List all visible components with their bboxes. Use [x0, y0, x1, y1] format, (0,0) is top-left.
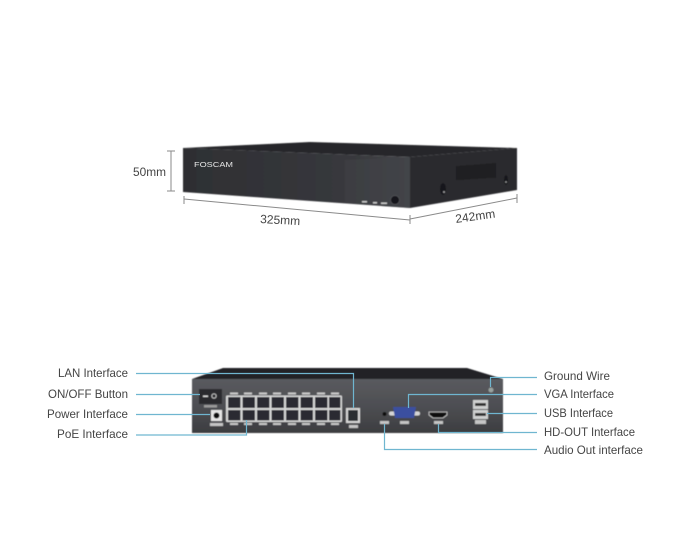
- power switch: [199, 389, 222, 404]
- side screws: [440, 175, 508, 195]
- power socket: [211, 410, 222, 421]
- dimension: depth 242mm: 242mm: [454, 207, 496, 226]
- dimension: height 50mm: 50mm: [133, 165, 166, 179]
- leader lines: [136, 374, 537, 450]
- VGA port: [389, 407, 420, 424]
- dimension: width 325mm: [184, 196, 410, 228]
- dimension: depth 242mm: [410, 194, 517, 226]
- HDMI port: [429, 412, 447, 424]
- dimension: height 50mm: [133, 151, 175, 191]
- chassis side face: [410, 148, 517, 208]
- LAN port: [346, 408, 360, 428]
- right labels: HD-OUT Interface: [544, 425, 635, 439]
- right labels: USB Interface: [544, 406, 613, 420]
- front IR receiver: [390, 196, 400, 204]
- chassis top face: [183, 142, 517, 157]
- left labels: [47, 366, 128, 441]
- front indicator lights: [362, 201, 387, 204]
- side vent grille: [457, 163, 495, 180]
- rear top face: [192, 368, 503, 379]
- ground screw: [488, 388, 494, 392]
- chassis front face: [183, 148, 410, 208]
- right labels: VGA Interface: [544, 387, 614, 401]
- left labels: Power Interface: [47, 407, 128, 421]
- left labels: PoE Interface: [57, 427, 128, 441]
- rear panel: [192, 379, 503, 433]
- audio out jack: [380, 412, 389, 424]
- front bevel highlight: [345, 157, 410, 208]
- PoE port block: [226, 392, 342, 425]
- right labels: Ground Wire: [544, 369, 610, 383]
- right labels: Audio Out interface: [544, 443, 643, 457]
- dimension: width 325mm: 325mm: [260, 212, 301, 228]
- brand logo: FOSCAM: [194, 162, 233, 169]
- product: NVR front perspective view: [183, 142, 517, 208]
- product: NVR rear panel view: [192, 368, 503, 433]
- USB ports: [473, 400, 488, 424]
- right labels: [544, 369, 643, 457]
- left labels: ON/OFF Button: [48, 387, 128, 401]
- left labels: LAN Interface: [58, 366, 128, 380]
